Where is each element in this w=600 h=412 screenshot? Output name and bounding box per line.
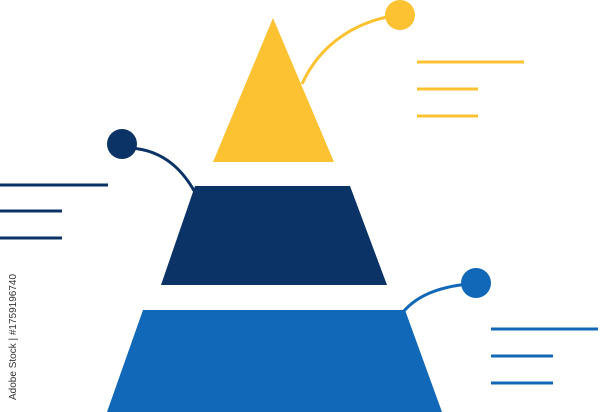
connector: navy [107,129,198,198]
text lines: blue [491,329,598,383]
watermark text: Adobe Stock | #1759196740 [8,274,19,400]
pyramid tier 3: blue trapezoid [107,310,442,412]
text lines: navy [0,185,108,238]
text lines: yellow [417,62,524,116]
pyramid tier 2: navy trapezoid [161,186,387,285]
pyramid tier 1: yellow triangle [213,18,334,162]
connector: blue [400,268,491,316]
connector: yellow [302,0,415,84]
